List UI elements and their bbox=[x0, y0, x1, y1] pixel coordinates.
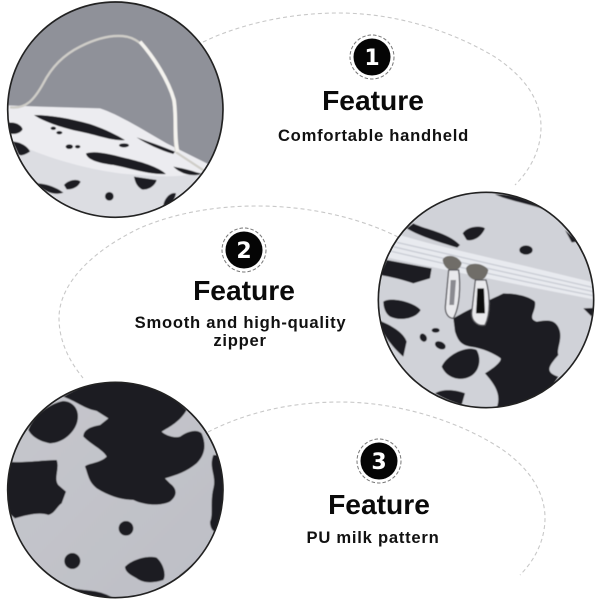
leather base bbox=[379, 193, 593, 407]
dashed arc: feature 3 bbox=[208, 402, 545, 575]
circle outline bbox=[8, 2, 223, 217]
bag side bbox=[16, 148, 202, 216]
photo: milk pattern leather bbox=[6, 382, 224, 598]
heading: feature 2: Feature bbox=[193, 274, 295, 306]
bag top bbox=[8, 104, 208, 177]
badge 1: 1 bbox=[364, 46, 380, 71]
description: feature 2 bbox=[135, 313, 346, 350]
cow spots bbox=[3, 380, 227, 598]
circle outline bbox=[8, 382, 223, 598]
circle outline bbox=[378, 192, 594, 408]
photo: comfortable handle bbox=[0, 0, 233, 220]
badge 2 bbox=[222, 228, 266, 272]
photo: zipper bbox=[378, 192, 594, 408]
description: feature 3: PU milk pattern bbox=[307, 528, 439, 547]
metal pull: right bbox=[466, 264, 489, 325]
grey backdrop bbox=[8, 2, 222, 164]
badge 3: 3 bbox=[371, 450, 387, 475]
leather base bbox=[12, 390, 216, 597]
heading: feature 3: Feature bbox=[328, 488, 430, 520]
description: feature 1: Comfortable handheld bbox=[278, 126, 469, 145]
dashed arc: feature 1 bbox=[203, 13, 541, 185]
cow spots bbox=[378, 194, 597, 412]
handle bbox=[10, 36, 204, 171]
cow spots bbox=[9, 115, 202, 207]
badge 2: 2 bbox=[236, 239, 252, 264]
metal pull: left bbox=[443, 256, 462, 318]
heading: feature 1: Feature bbox=[322, 84, 424, 116]
badge 1 bbox=[350, 35, 394, 79]
description: feature 2: zipper bbox=[213, 331, 267, 350]
zipper tape bbox=[383, 235, 597, 300]
description: feature 2: Smooth and high-quality bbox=[135, 313, 346, 332]
dashed arc: feature 2 bbox=[59, 206, 398, 378]
badge 3 bbox=[357, 439, 401, 483]
